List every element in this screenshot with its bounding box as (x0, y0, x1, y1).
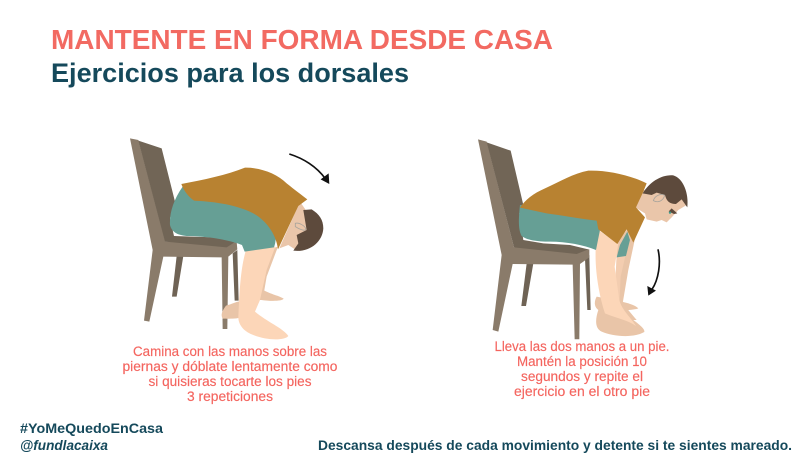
title: MANTENTE EN FORMA DESDE CASA (51, 24, 553, 55)
far foot (261, 290, 284, 301)
subtitle: Ejercicios para los dorsales (51, 58, 409, 88)
chair frame (478, 139, 589, 339)
ear (295, 223, 306, 230)
shirt (520, 171, 647, 244)
caption left: piernas y dóblate lentamente como (122, 359, 338, 374)
figure 2: person on chair reaching one foot (478, 139, 688, 339)
far arm and leg (617, 230, 637, 320)
far chair legs (172, 250, 239, 301)
caption left: Camina con las manos sobre las (133, 344, 327, 359)
ear (653, 195, 665, 202)
shirt (181, 168, 307, 249)
shorts (170, 187, 276, 252)
near arm and hand (596, 230, 636, 326)
hair (643, 175, 688, 207)
caption left: si quisieras tocarte los pies (148, 374, 312, 389)
near foot (596, 307, 644, 336)
far foot (595, 297, 638, 311)
arrow (652, 249, 659, 289)
arrow (289, 154, 325, 179)
hashtag: #YoMeQuedoEnCasa (20, 421, 164, 436)
caption left: 3 repeticiones (187, 389, 273, 404)
chair back and seat (138, 141, 236, 247)
hand on ankle (222, 301, 244, 319)
caption right (494, 339, 670, 399)
neck and face (636, 190, 687, 222)
shorts far side (617, 232, 630, 257)
near leg (238, 247, 288, 339)
far chair legs (521, 255, 591, 310)
far leg (258, 247, 278, 300)
chair back and seat (487, 142, 588, 254)
hair (293, 209, 323, 251)
lighter far leg strip (615, 253, 626, 307)
shorts (519, 205, 603, 250)
caption right: Lleva las dos manos a un pie. (494, 339, 670, 354)
chair frame (130, 138, 237, 329)
caption left (122, 344, 338, 404)
eye (669, 208, 677, 214)
handle: @fundlacaixa (20, 438, 108, 453)
neck and face (279, 202, 307, 249)
caption right: ejercicio en el otro pie (514, 384, 650, 399)
figure 1: person on chair bending to feet (130, 138, 329, 339)
caption right: segundos y repite el (521, 369, 643, 384)
caption right: Mantén la posición 10 (517, 354, 647, 369)
footer note: Descansa después de cada movimiento y detente si te sientes mareado. (318, 437, 792, 453)
